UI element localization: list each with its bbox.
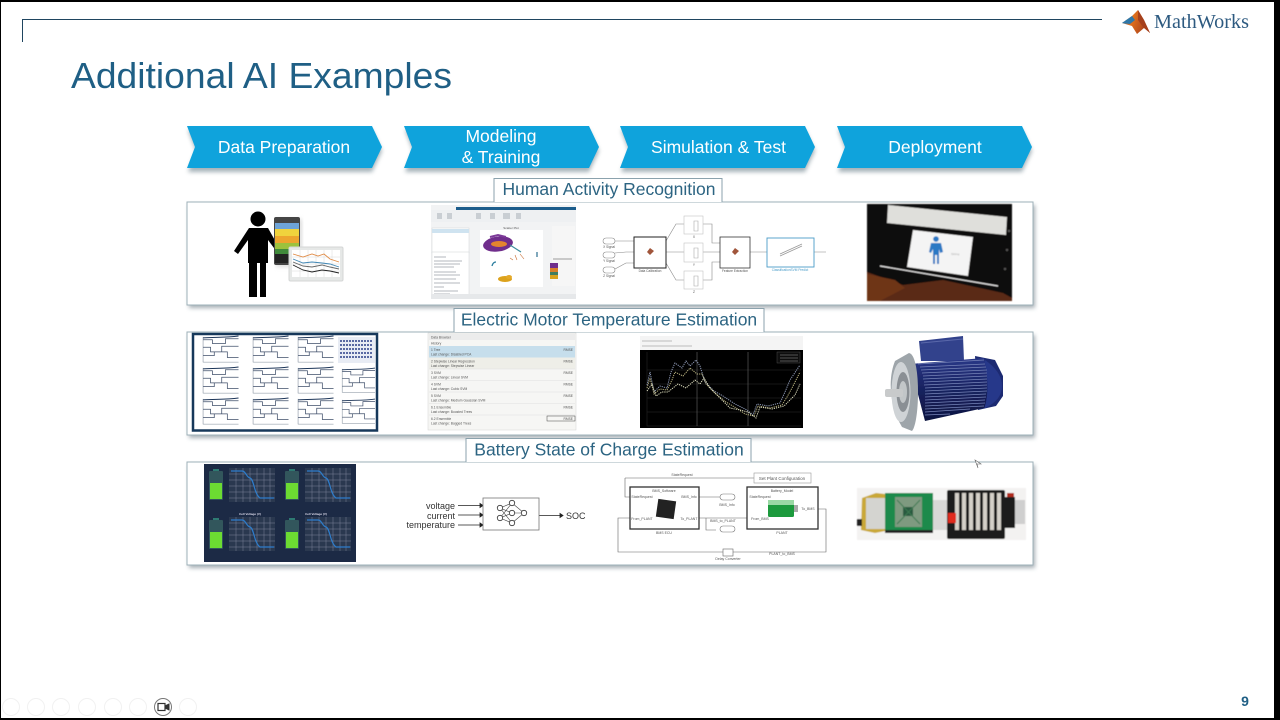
diagram: Simulink model for activity recognition: Y Signal (603, 259, 615, 263)
tab heading: Battery State of Charge Estimation (474, 440, 744, 460)
more button (180, 698, 196, 716)
table: model history list: Data Browser (431, 336, 452, 340)
diagram: Simulink model for activity recognition: X (693, 235, 696, 239)
diagram: BMS Simulink model: Battery_Model (771, 489, 794, 493)
table: model history list: RMSE (563, 382, 574, 386)
camera button (154, 698, 172, 716)
chevron shadows (188, 130, 1032, 172)
table: model history list: Last change: Cubic SVM (431, 387, 468, 391)
next button (28, 698, 44, 716)
step: Deployment (837, 126, 1032, 168)
table: model history list (428, 333, 576, 430)
dashboard: four battery cell charts (204, 464, 356, 562)
diagram: Simulink model for activity recognition (603, 216, 826, 294)
step: Data Preparation (187, 126, 382, 168)
diagram: BMS Simulink model: StateRequest (631, 495, 653, 499)
MathWorks logo (1122, 10, 1249, 34)
dashboard: four battery cell charts: Cell Voltage (V) (305, 512, 327, 516)
step: Modeling & Training (404, 126, 599, 168)
icon: membrane (1122, 10, 1150, 34)
input labels: temperature (406, 520, 455, 530)
subtitles button (130, 698, 146, 716)
diagram: BMS Simulink model: From_PLANT (631, 517, 654, 521)
table: model history list: Last change: Medium Gaussian SVM (431, 398, 486, 402)
diagram: BMS Simulink model: To_PLANT (681, 517, 698, 521)
table: model history list: Last change: Disabled PCA (431, 352, 472, 356)
table: model history list: 6.2 Ensemble (431, 417, 451, 421)
previous button (2, 698, 20, 716)
panel: Battery State of Charge Estimation (187, 438, 1035, 568)
diagram: BMS Simulink model: Set Plant Configuration (759, 476, 806, 481)
table: model history list: RMSE (563, 360, 574, 364)
step: Simulation & Test: Simulation & Test (651, 137, 786, 157)
panel frame (187, 202, 1035, 308)
photo: BMS hardware boards (857, 488, 1026, 540)
photo: tablet showing detected activity (867, 204, 1012, 301)
table: model history list: RMSE (563, 417, 574, 421)
table: model history list: 4 SVM (431, 382, 441, 386)
input labels (406, 501, 455, 530)
step: Data Preparation: Data Preparation (218, 137, 350, 157)
diagram: BMS Simulink model: BMS ECU (656, 531, 672, 535)
step: Deployment: Deployment (888, 137, 982, 157)
diagram: BMS Simulink model: PLANT (776, 531, 789, 535)
wordmark: MathWorks (1154, 12, 1249, 33)
table: model history list: RMSE (563, 394, 574, 398)
table: model history list: Last change: Linear SVM (431, 376, 468, 380)
table: model history list: Last change: Stepwise Linear (431, 364, 475, 368)
diagram: BMS Simulink model: BMS_Software (652, 489, 676, 493)
chart: grid of time-series plots (193, 334, 377, 430)
diagram: Simulink model for activity recognition: Data Calibration (639, 269, 662, 273)
table: model history list: 1 Tree (431, 348, 441, 352)
chart: predicted vs measured temperature scope (640, 336, 803, 428)
diagram: Simulink model for activity recognition: Z Signal (603, 274, 615, 278)
icon: mouse cursor (975, 460, 981, 468)
diagram: neural network SOC estimator (406, 498, 586, 530)
table: model history list: Last change: Bagged Trees (431, 422, 472, 426)
diagram: Simulink model for activity recognition: Z (693, 290, 695, 294)
network box (483, 498, 539, 530)
diagram: BMS Simulink model (618, 473, 826, 561)
diagram: BMS Simulink model: From_BMS (751, 517, 770, 521)
photo: tablet showing detected activity: Sitting (951, 252, 960, 256)
step: Modeling & Training: & Training (462, 147, 540, 167)
time-series plot matrix (203, 336, 375, 424)
header rule (22, 20, 1102, 42)
process chevrons (187, 126, 1032, 172)
table: model history list: Last change: Boosted Trees (431, 410, 472, 414)
step: Modeling & Training: Modeling (465, 126, 537, 146)
table: model history list: 2 Stepwise Linear Regression (431, 360, 475, 364)
diagram: BMS Simulink model: BMS_Info (681, 495, 697, 499)
output label: SOC (566, 511, 586, 521)
diagram: BMS Simulink model: StateRequest (671, 473, 693, 477)
dashboard: four battery cell charts: Cell Voltage (V) (239, 512, 261, 516)
pen button (52, 698, 70, 716)
title: Additional AI Examples (71, 55, 452, 96)
diagram: Simulink model for activity recognition: X Signal (603, 245, 615, 249)
slides button (78, 698, 96, 716)
table: model history list: 6.1 Ensemble (431, 406, 451, 410)
step: Simulation & Test (620, 126, 815, 168)
tab heading: Human Activity Recognition (502, 179, 716, 199)
thumbnail: classification app scatter plot: Scatter Plot (503, 226, 519, 230)
diagram: BMS Simulink model: StateRequest (749, 495, 771, 499)
input labels: current (427, 511, 455, 521)
input and output arrows (458, 504, 563, 527)
diagram: BMS Simulink model: To_BMS (801, 507, 815, 511)
icon: person with phone and chart (234, 212, 343, 297)
diagram: BMS Simulink model: Delay Converter (715, 557, 741, 561)
table: model history list: 5 SVM (431, 394, 441, 398)
presentation toolbar (2, 698, 196, 716)
panel: Electric Motor Temperature Estimation (187, 308, 1035, 438)
panel frame (187, 332, 1035, 438)
diagram: BMS Simulink model: BMS_Info (719, 503, 735, 507)
diagram: BMS Simulink model: PLANT_to_BMS (769, 552, 795, 556)
table: model history list: RMSE (563, 371, 574, 375)
zoom button (104, 698, 122, 716)
diagram: BMS Simulink model: BMS_to_PLANT (710, 519, 737, 523)
tab heading: Electric Motor Temperature Estimation (461, 310, 757, 330)
photo: electric motor (885, 336, 1003, 431)
input labels: voltage (426, 501, 455, 511)
table: model history list: History (431, 342, 442, 346)
panel: Human Activity Recognition (187, 178, 1035, 308)
diagram: Simulink model for activity recognition: Feature Extraction (722, 269, 748, 273)
panel frame (187, 462, 1035, 568)
page number: 9 (1241, 693, 1249, 709)
diagram: Simulink model for activity recognition: Y (693, 263, 696, 267)
table: model history list: 3 SVM (431, 371, 441, 375)
diagram: Simulink model for activity recognition: ClassificationSVM Predict (772, 268, 808, 272)
thumbnail: classification app scatter plot (431, 205, 576, 299)
table: model history list: RMSE (563, 348, 574, 352)
table: model history list: RMSE (563, 406, 574, 410)
